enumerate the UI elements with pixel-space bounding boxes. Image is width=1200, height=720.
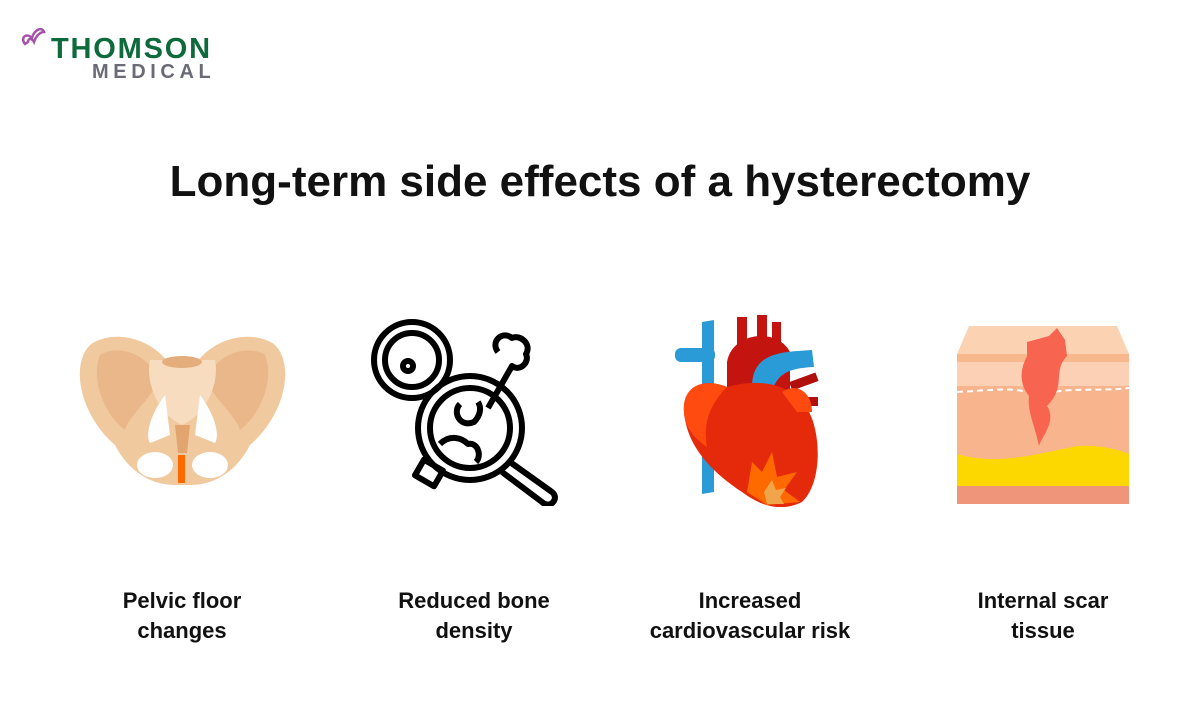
icon: skin scar xyxy=(957,326,1129,504)
label: bone density: density xyxy=(435,618,513,643)
label: cardiovascular: cardiovascular risk xyxy=(650,618,850,643)
icon: magnifier with bone xyxy=(371,319,558,506)
label: cardiovascular xyxy=(650,588,850,643)
title: Long-term side effects of a hysterectomy xyxy=(170,157,1030,206)
label: pelvic floor: changes xyxy=(137,618,227,643)
label: bone density: Reduced bone xyxy=(398,588,550,613)
logo text: MEDICAL: MEDICAL xyxy=(92,61,215,83)
label: pelvic floor xyxy=(123,588,241,643)
label: pelvic floor: Pelvic floor xyxy=(123,588,241,613)
label: bone density xyxy=(398,588,550,643)
label: cardiovascular: Increased xyxy=(699,588,801,613)
label: scar tissue: Internal scar xyxy=(978,588,1108,613)
logo xyxy=(22,28,215,83)
label: scar tissue xyxy=(978,588,1108,643)
icon: heart xyxy=(675,315,818,507)
icon: pelvis xyxy=(80,336,286,485)
icon: butterfly heart xyxy=(22,28,46,46)
label: scar tissue: tissue xyxy=(1011,618,1075,643)
logo text: THOMSON: THOMSON xyxy=(51,33,212,65)
